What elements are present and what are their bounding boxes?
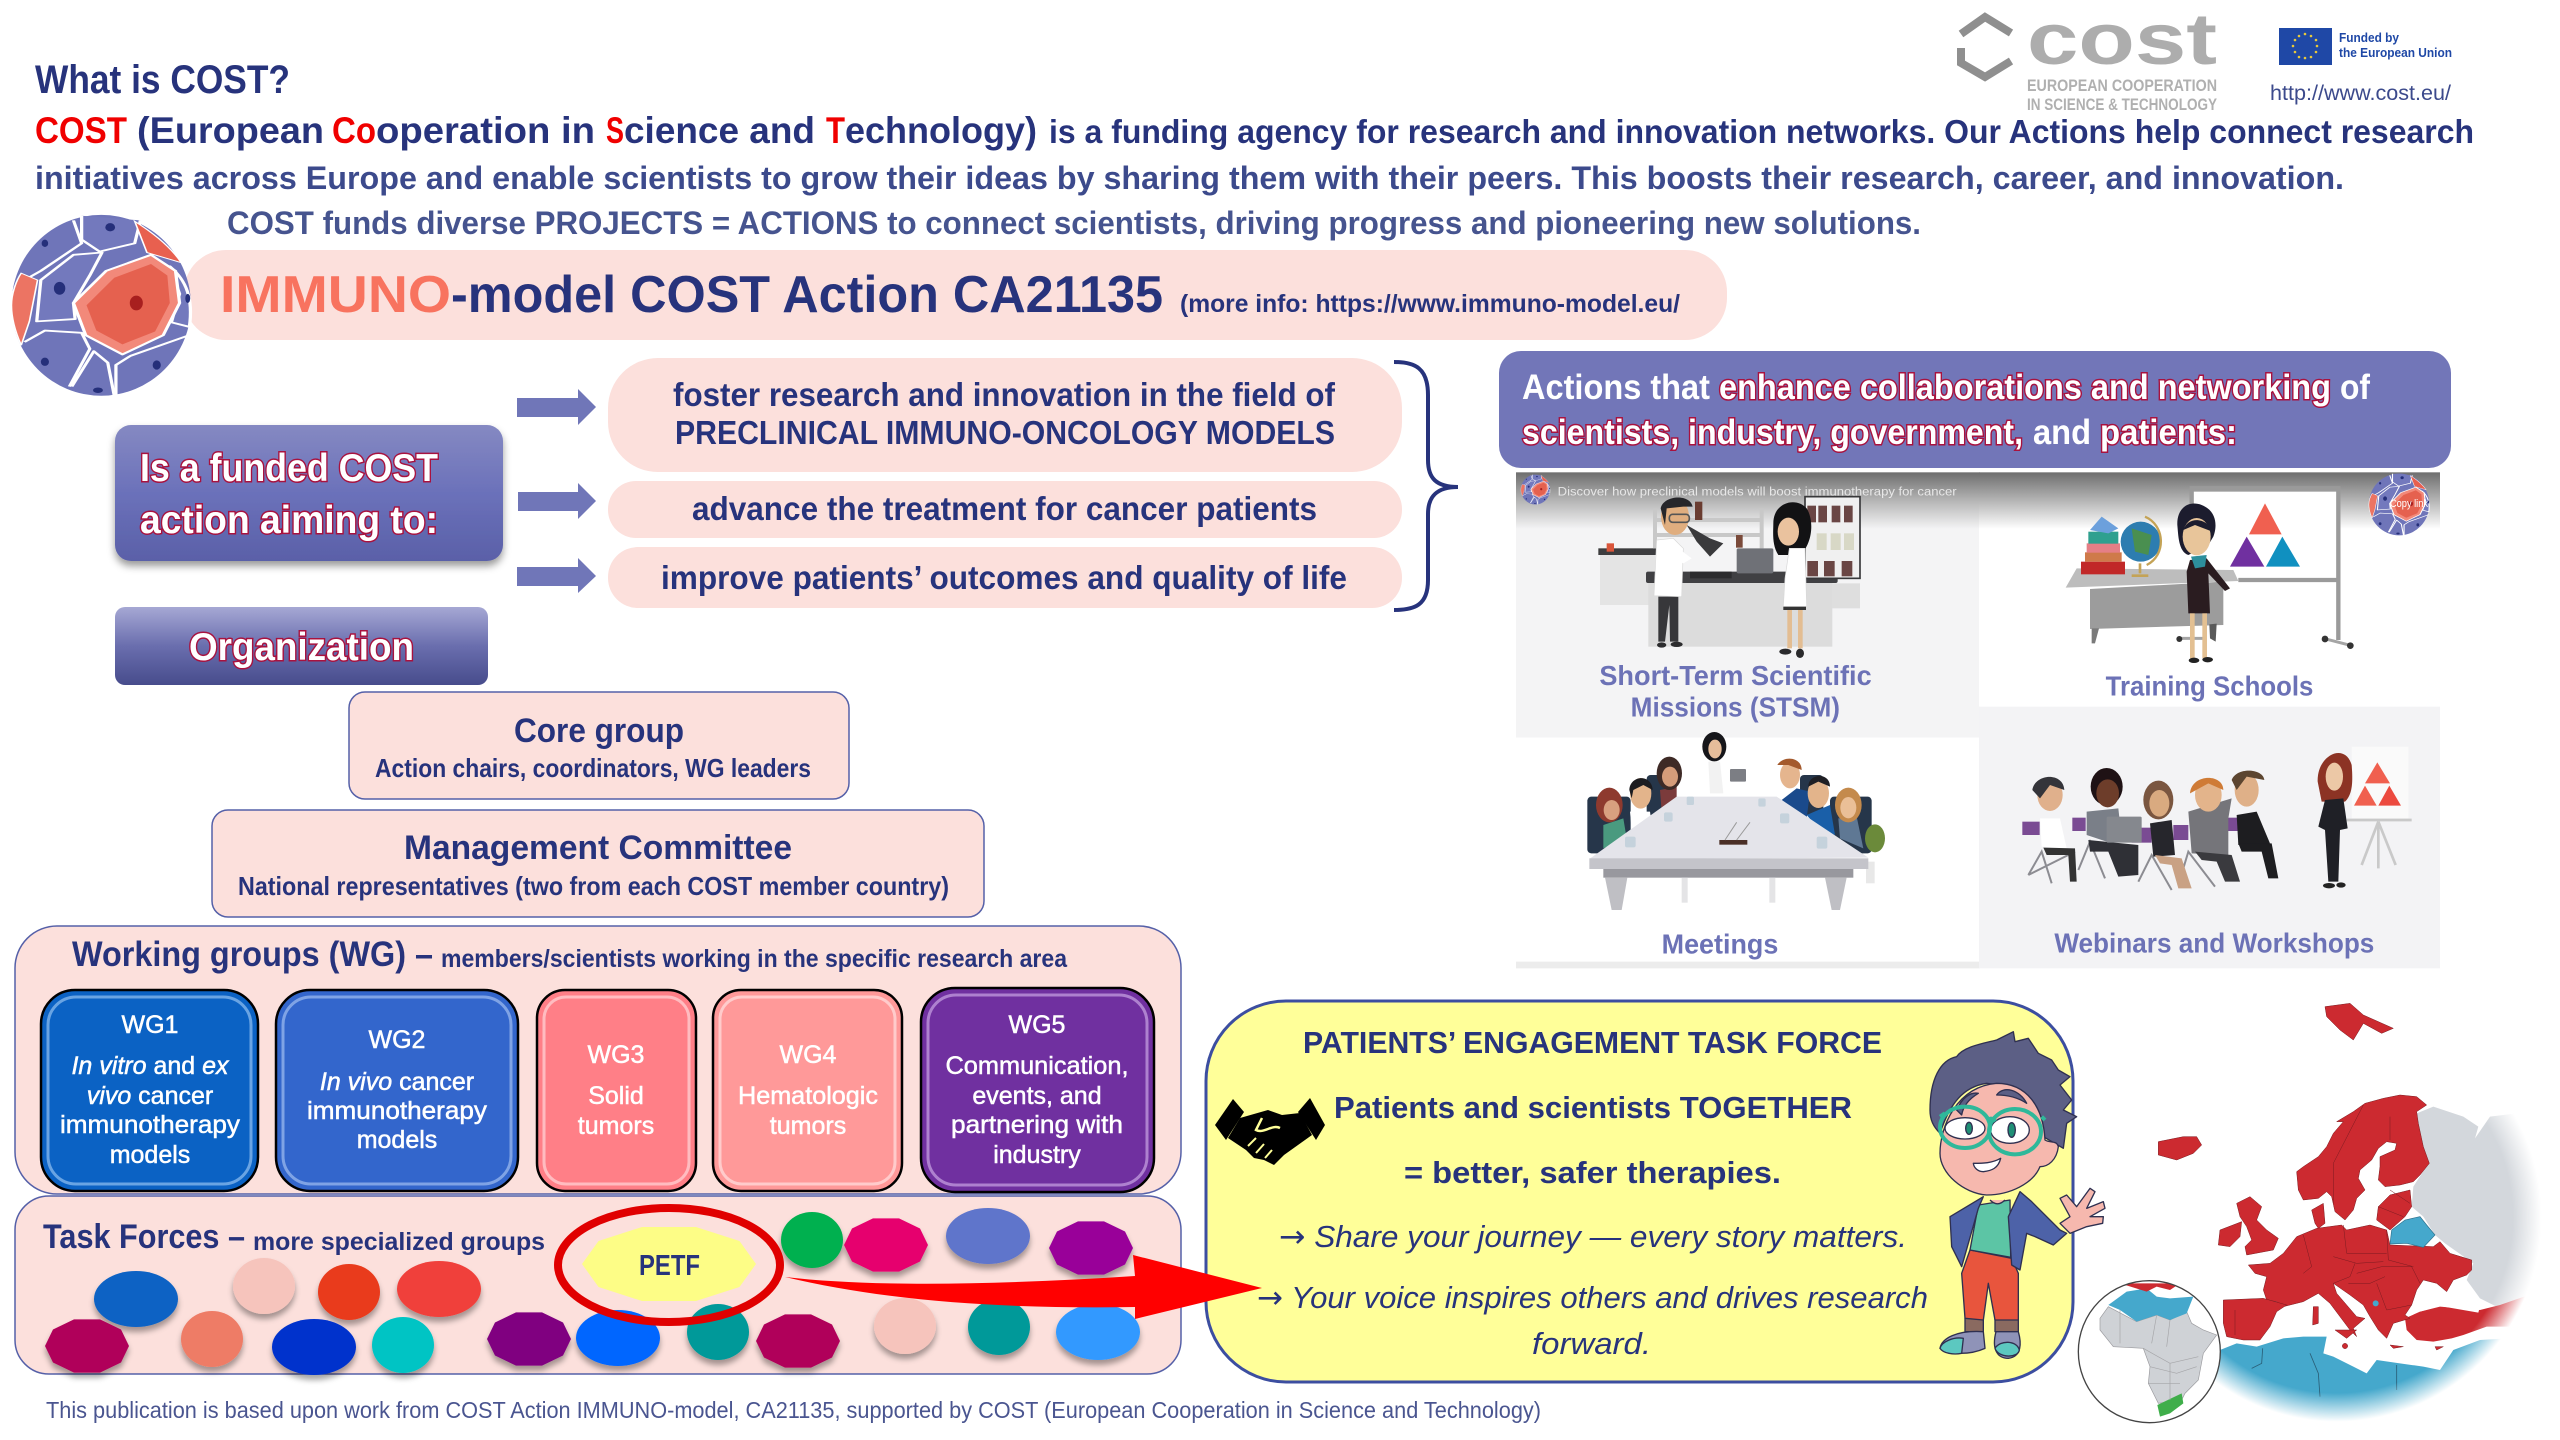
image panel: Meetings [1516,732,1980,968]
link: cost.eu: http://www.cost.eu/ [2270,82,2451,105]
card: WG1: immunotherapy [60,1111,241,1139]
panel: Patients Engagement Task Force: Patients and scientists TOGETHER [1334,1090,1852,1125]
caption: Short-Term Scientific Missions: Short-Term Scientific [1599,660,1872,691]
logo: COST: cost [2027,0,2217,80]
pill: improve outcomes [608,547,1402,608]
arrow: aim 2 [518,483,596,519]
button: Organization [115,607,488,685]
card: WG1: vivo cancer [87,1082,213,1110]
panel: Actions that enhance collaborations [1499,351,2451,468]
box: Management Committee: Management Committee [404,829,792,867]
panel: Patients Engagement Task Force: forward. [1532,1326,1651,1361]
map sphere [2216,1106,2536,1420]
box: Is a funded COST action aiming to: action aiming to: [140,499,438,542]
panel: Task Forces [15,1196,1181,1375]
box: Core group [349,692,849,799]
caption: Short-Term Scientific Missions [1599,660,1872,723]
caption: Webinars and Workshops: Webinars and Workshops [2054,927,2374,958]
card: WG5: Communication, [946,1052,1128,1080]
text block: COST definition line 1: T [826,110,845,151]
text block: COST definition line 1: echnology) [845,110,1037,151]
illustration: character waving [1930,1032,2105,1358]
man [1658,597,1678,642]
illustration: webinar audience [2022,747,2412,890]
caption: in-video title: Discover how preclinical models will boost immunotherapy for cancer [1558,485,1957,499]
text block: COST definition line 1: S [606,110,624,151]
card: WG3: tumors [578,1112,654,1140]
pill: foster research [608,358,1402,472]
panel: Actions that enhance collaborations: of [2340,368,2370,407]
card: WG2: In vivo cancer [320,1068,474,1096]
box: Management Committee: National representatives (two from each COST member country) [238,871,949,901]
text block: COST definition line 1: (European [137,110,324,151]
image panel: STSM [1516,472,1980,738]
card: WG3: Solid [588,1082,644,1110]
highlight: PETF [558,1208,780,1322]
card: WG5: events, and [972,1082,1102,1110]
box: Core group: Core group [514,712,684,750]
panel: Actions that enhance collaborations: and [2033,413,2091,452]
logo: COST [1961,0,2218,114]
card: WG4: tumors [770,1112,846,1140]
image panel: Webinars and Workshops [1979,707,2440,968]
arrow: aim 3 [517,558,596,593]
box: Is a funded COST action aiming to: Is a funded COST [140,447,438,490]
region: Kosovo [2373,1300,2379,1306]
illustration: laboratory scene [1598,497,1860,658]
icon: handshake [1215,1098,1325,1165]
heading: Working groups [72,935,1068,974]
pill: foster research: PRECLINICAL IMMUNO-ONCOLOGY MODELS [675,414,1335,451]
card: WG1: In vitro and ex [71,1052,230,1080]
text block: COST definition line 1: COST [35,110,127,151]
inset globe: Africa [2078,1281,2220,1423]
panel: Patients Engagement Task Force: → Your voice inspires others and drives research [1257,1280,1928,1316]
panel: Actions that enhance collaborations: patients: [2100,413,2237,452]
card: WG2 [276,990,518,1191]
card: WG5 [921,988,1154,1192]
card: WG4: Hematologic [738,1082,878,1110]
banner: IMMUNO-model title: IMMUNO [220,266,451,324]
heading: What is COST?: What is COST? [35,58,290,102]
text block: COST definition line 1 [35,110,2474,151]
text block: COST definition line 2: initiatives across Europe and enable scientists to grow their ideas by sharing them with their peers. This boosts their research, career, and innovation. [35,160,2344,196]
panel: Actions that enhance collaborations: enhance collaborations and networking [1719,368,2331,407]
banner: IMMUNO-model title: -model COST Action CA21135 [451,266,1163,324]
panel: Patients Engagement Task Force [1206,1001,2073,1382]
box: Management Committee [212,810,984,917]
heading: Working groups: members/scientists working in the specific research area [441,945,1068,973]
card: WG5: industry [993,1141,1081,1169]
pill: advance the treatment [608,481,1402,538]
heading: Task Forces: Task Forces – [43,1218,245,1256]
panel: Patients Engagement Task Force: PATIENTS’ ENGAGEMENT TASK FORCE [1303,1025,1882,1060]
card: WG5: WG5 [1009,1011,1065,1039]
text block: COST definition line 1: operation in [376,110,595,151]
banner: IMMUNO-model title: (more info: https://www.immuno-model.eu/ [1180,290,1680,318]
panel: Actions that enhance collaborations: scientists, industry, government, [1522,413,2023,452]
map: COST member countries [2078,1003,2560,1440]
caption: Training Schools: Training Schools [2106,671,2313,702]
logo: video corner with Copy link [2369,473,2429,535]
card: WG2: models [357,1126,437,1154]
card: WG5: partnering with [951,1111,1123,1139]
card: WG3: WG3 [588,1041,644,1069]
pill: foster research: foster research and innovation in the field of [673,376,1336,413]
logo: video corner with Copy link: Copy link [2390,498,2428,510]
caption: Short-Term Scientific Missions: Missions (STSM) [1631,692,1840,723]
heading: Working groups: Working groups (WG) – [72,935,433,974]
box: Core group: Action chairs, coordinators, WG leaders [375,753,811,783]
pill: advance the treatment: advance the treatment for cancer patients [692,490,1317,527]
box: Is a funded COST action aiming to [115,425,503,561]
logo: COST: IN SCIENCE & TECHNOLOGY [2027,95,2218,114]
card: WG2: immunotherapy [307,1097,488,1125]
text block: COST funds projects: COST funds diverse PROJECTS = ACTIONS to connect scientists, driving progress and pioneering new solutions. [227,205,1921,241]
region: Belarus [2390,1217,2435,1247]
card: WG1: models [110,1141,190,1169]
card: WG3 [537,990,696,1191]
arrow: red arrow from PETF to panel [785,1255,1262,1319]
panel: Working groups [15,926,1181,1194]
footer acknowledgement: This publication is based upon work from COST Action IMMUNO-model, CA21135, supported by COST (European Cooperation in Science and Technology) [46,1397,1541,1423]
heading: Task Forces [43,1218,545,1256]
card: WG1 [41,990,258,1191]
image panel: Training Schools [1979,472,2440,707]
small logo on video [1521,475,1550,505]
woman [1773,502,1811,555]
panel: Patients Engagement Task Force: → Share your journey — every story matters. [1279,1219,1907,1255]
panel: Actions that enhance collaborations: Actions that [1522,368,1710,407]
logo: Funded by the European Union [2279,28,2452,65]
region: Europe [2158,1003,2472,1350]
logo: COST: EUROPEAN COOPERATION [2027,76,2217,95]
text block: COST definition line 1: cience and [624,110,815,151]
card: WG4: WG4 [780,1041,837,1069]
logo: Funded by the European Union: Funded by [2339,30,2400,45]
highlight: PETF: PETF [639,1250,700,1282]
task force blobs [45,1208,1140,1375]
icon: cancer cell cluster [11,215,191,396]
text block: COST definition line 1: Co [332,110,376,151]
heading: Task Forces: more specialized groups [253,1228,545,1256]
caption: Meetings: Meetings [1662,928,1778,959]
pill: improve outcomes: improve patients’ outcomes and quality of life [661,559,1347,596]
card: WG4 [713,990,902,1191]
brace [1394,362,1458,610]
logo: Funded by the European Union: the European Union [2339,45,2452,60]
illustration: teacher and whiteboard [2066,488,2354,663]
text block: COST definition line 1: is a funding agency for research and innovation networks. Our Actions help connect research [1049,113,2474,150]
button: Organization: Organization [189,626,414,669]
panel: Patients Engagement Task Force: = better, safer therapies. [1404,1155,1781,1190]
banner: IMMUNO-model title [184,250,1727,340]
arrow: aim 1 [517,389,596,425]
card: WG1: WG1 [122,1011,178,1039]
card: WG2: WG2 [369,1026,425,1054]
illustration: meeting table [1587,732,1885,910]
